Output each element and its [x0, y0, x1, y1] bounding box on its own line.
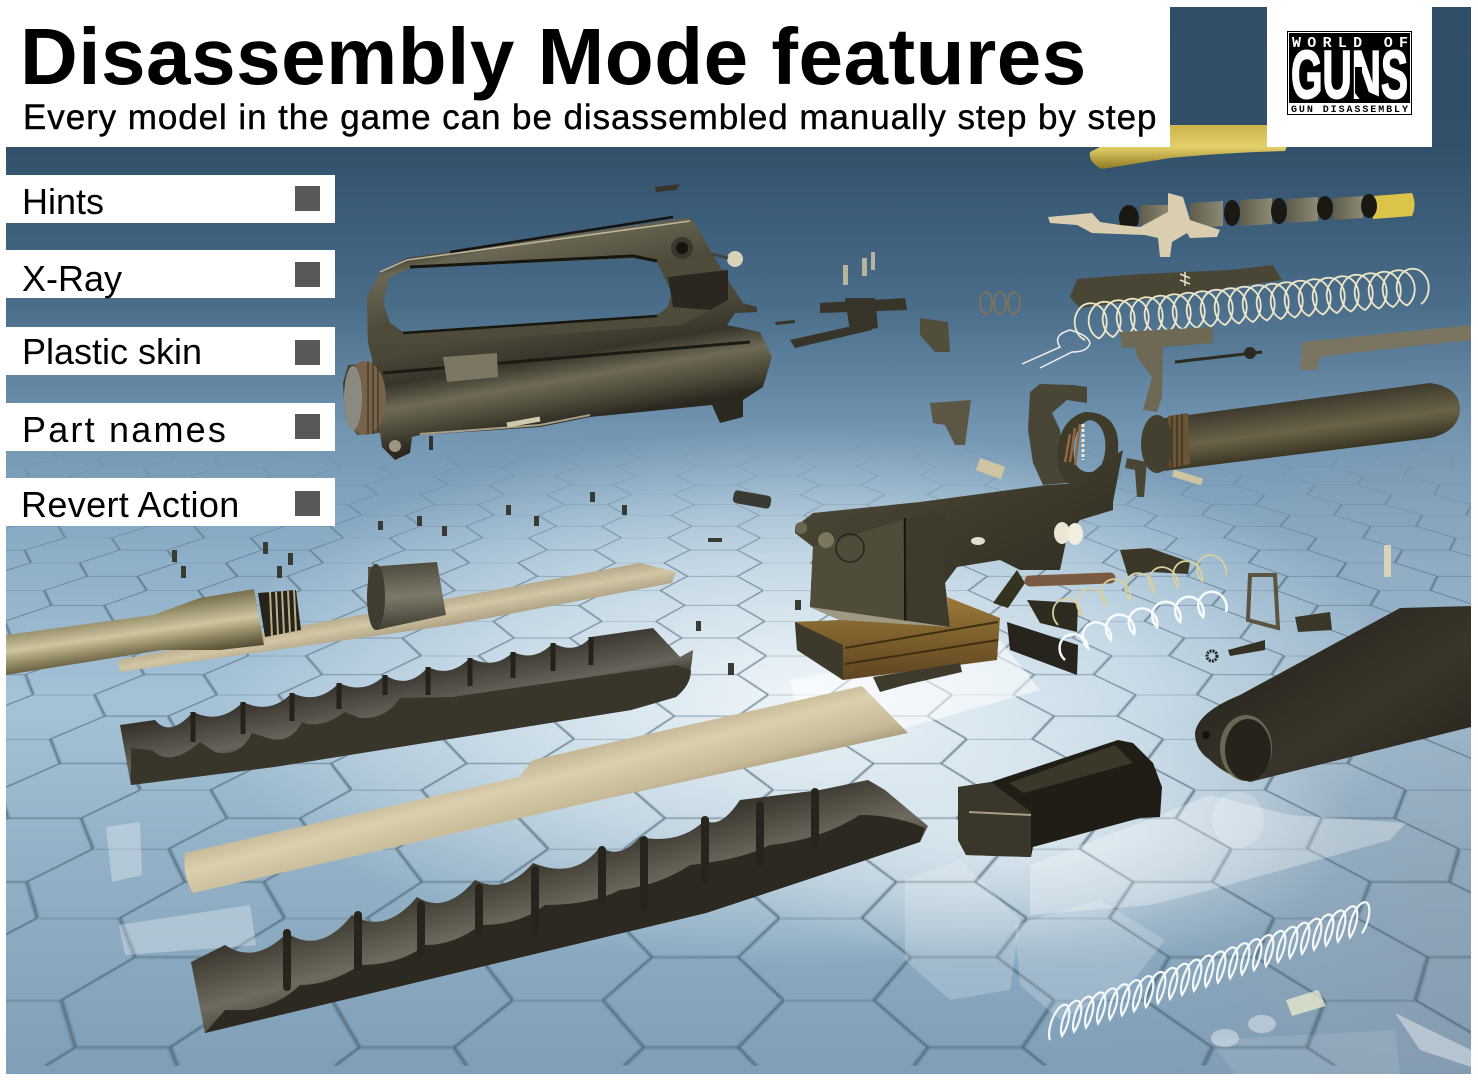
- part: bolt carrier: [1070, 265, 1282, 308]
- menu: Part names: [6, 403, 335, 451]
- part: small rings: [980, 292, 1020, 314]
- menu: X-Ray: X-Ray: [22, 258, 122, 299]
- part: small wire spring: [1022, 330, 1090, 368]
- reflections on floor: [106, 640, 1471, 1074]
- part: gold tube: [1090, 125, 1296, 169]
- part: upper receiver: [343, 217, 772, 460]
- part: tan and white coil loops: [1053, 555, 1227, 660]
- header panel: [0, 0, 1170, 147]
- part: small lower items: [873, 548, 1332, 692]
- page frame: [0, 0, 6, 1080]
- part: small upper pins, rods and selector: [655, 184, 971, 445]
- part: lower handguard half: [191, 780, 928, 1033]
- part: buffer tube: [1141, 383, 1460, 473]
- part: trigger: [1120, 327, 1213, 412]
- menu: X-Ray: [6, 250, 335, 298]
- part: recoil spring: [1075, 269, 1429, 340]
- menu: Plastic skin: [6, 327, 335, 375]
- menu: Revert Action: [6, 478, 335, 526]
- title: Disassembly Mode features: [20, 12, 1087, 101]
- part: tan handguard shield: [184, 686, 908, 893]
- part: trigger housing ring: [1057, 412, 1147, 497]
- part: magazine block: [795, 597, 1000, 680]
- part: barrel: [6, 589, 301, 675]
- part: white recoil spring reflection: [1049, 902, 1369, 1040]
- menu: Hints: Hints: [22, 181, 104, 222]
- part: small pins: [172, 464, 1391, 675]
- part: upper handguard half: [120, 628, 693, 785]
- part: lower receiver: [795, 450, 1123, 632]
- menu: Part names: Part names: [22, 409, 228, 450]
- part: gas tube and heat shield: [118, 563, 676, 672]
- part: barrel nut: [367, 562, 446, 630]
- menu: Revert Action: Revert Action: [21, 484, 240, 525]
- part: hammer and buffer assembly: [1048, 193, 1414, 257]
- logo: World of Guns: WORLD OF: [1292, 35, 1408, 52]
- part: charging handle: [1300, 325, 1471, 370]
- menu: Plastic skin: Plastic skin: [22, 331, 202, 372]
- part: pistol grip: [958, 740, 1162, 857]
- subtitle: Every model in the game can be disassembled manually step by step: [23, 98, 1157, 137]
- logo panel: [1267, 0, 1432, 147]
- part: hammer frame: [1028, 384, 1087, 485]
- hexagonal floor grid: [6, 451, 1471, 1066]
- menu: Hints: [6, 175, 335, 223]
- part: butt stock: [1195, 606, 1471, 782]
- part: hammer pin: [1175, 352, 1262, 362]
